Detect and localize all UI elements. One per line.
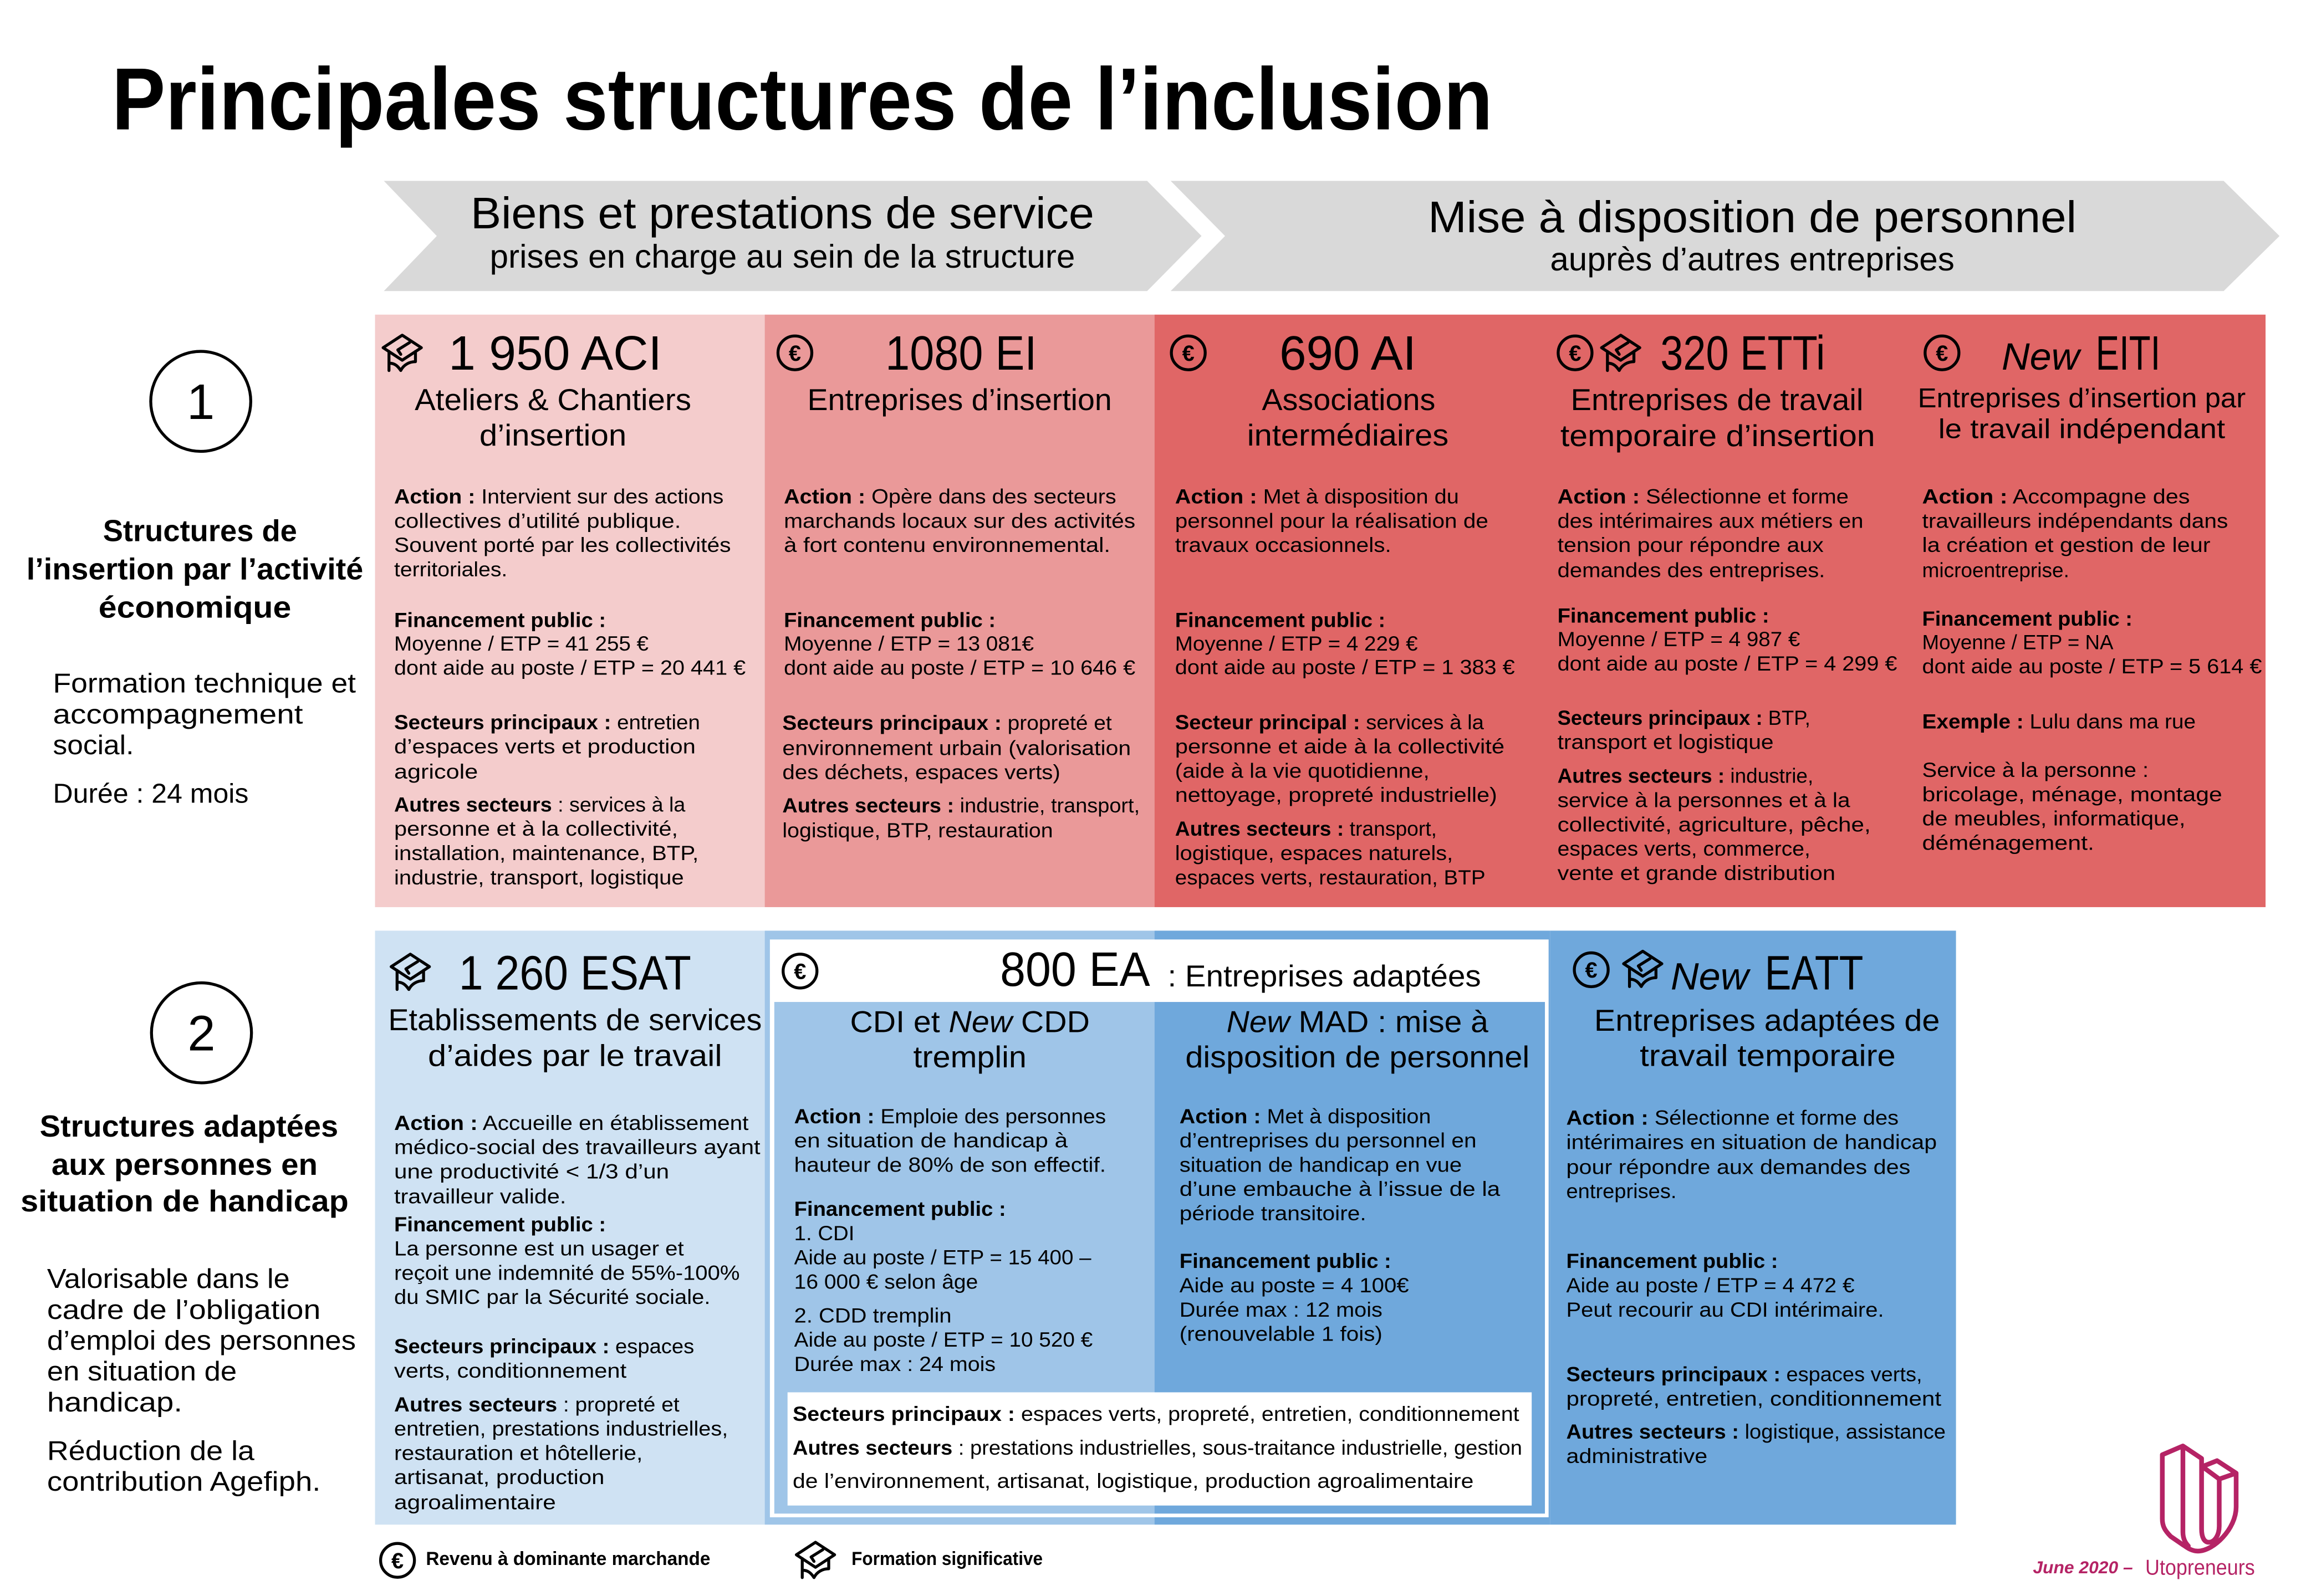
card: AI: Associations <box>1262 383 1435 417</box>
text block: ESAT: Action : Accueille en établissement <box>394 1111 749 1134</box>
card: AI: Action : Met à disposition du <box>1175 485 1459 508</box>
text block: ACI <box>394 485 746 889</box>
heading: ESAT: 1 260 ESAT <box>459 946 691 1000</box>
text block: ACI: dont aide au poste / ETP = 20 441 € <box>394 656 746 679</box>
text block: ESAT: artisanat, production <box>394 1465 604 1488</box>
sub-panel: CDI et New CDD tremplin: CDI et New CDD <box>850 1005 1090 1039</box>
card: ETTi: des intérimaires aux métiers en <box>1558 509 1863 532</box>
panel: ACI <box>375 315 765 907</box>
sub-panel: CDI et New CDD tremplin: en situation de handicap à <box>794 1129 1068 1152</box>
arrow: biens et prestations de service: prises en charge au sein de la structure <box>489 238 1075 275</box>
icon: formation <box>383 335 421 371</box>
sub-panel: New MAD: Action : Met à disposition <box>1180 1104 1431 1128</box>
card: EITI: Financement public : <box>1922 607 2132 630</box>
text block: EI: environnement urbain (valorisation <box>782 736 1131 759</box>
panel: EATT <box>1550 930 1956 1525</box>
text block: ACI: Moyenne / ETP = 41 255 € <box>394 632 649 655</box>
callout: secteurs EA: de l’environnement, artisanat, logistique, production agroalimentaire <box>793 1469 1473 1492</box>
card: ETTi: 320 ETTi <box>1660 326 1825 380</box>
text block: EATT: Action : Sélectionne et forme des <box>1567 1106 1899 1129</box>
icons: revenu marchand et formation: € <box>1585 958 1598 983</box>
card: EITI: déménagement. <box>1922 831 2094 854</box>
EA header <box>783 942 1481 996</box>
text block: ESAT <box>394 1111 761 1513</box>
legend: formation significative <box>797 1542 1043 1578</box>
section 2 label: structures adaptées handicap: en situation de <box>47 1357 237 1387</box>
sub-panel: CDI et New CDD tremplin: Action : Emploie des personnes <box>794 1104 1106 1128</box>
sub-panel: New MAD: période transitoire. <box>1180 1201 1366 1225</box>
text block: EATT: propreté, entretien, conditionnement <box>1567 1387 1942 1410</box>
text block: EATT: Financement public : <box>1567 1249 1778 1272</box>
legend: revenu à dominante marchande: Revenu à dominante marchande <box>426 1548 710 1569</box>
card: EITI: Action : Accompagne des <box>1922 485 2190 508</box>
text block: EI: Autres secteurs : industrie, transport, <box>782 794 1140 817</box>
section 1 label: insertion par l'activité économique: l’insertion par l’activité <box>27 552 363 586</box>
sub-panel: New MAD: New MAD : mise à <box>1227 1005 1489 1039</box>
section 1 label: insertion par l'activité économique: social. <box>53 730 134 760</box>
subtitle: EATT: Entreprises adaptées de <box>1594 1004 1940 1037</box>
legend: formation significative: Formation significative <box>851 1548 1043 1569</box>
card: AI: Autres secteurs : transport, <box>1175 817 1437 840</box>
logo: Utopreneurs <box>2033 1446 2255 1579</box>
card: ETTi: Entreprises de travail <box>1570 383 1863 417</box>
section 1 label: insertion par l'activité économique: Durée : 24 mois <box>53 779 248 809</box>
heading: EATT <box>1671 946 1863 1000</box>
card: EITI: le travail indépendant <box>1938 415 2225 444</box>
card: ETTi: temporaire d’insertion <box>1560 419 1875 453</box>
sub-panel: CDI et New CDD tremplin <box>774 1002 1155 1513</box>
text block: ESAT: du SMIC par la Sécurité sociale. <box>394 1285 710 1308</box>
card: EITI: microentreprise. <box>1922 558 2069 581</box>
text block: EI: Secteurs principaux : propreté et <box>782 711 1112 734</box>
heading: EATT: New <box>1671 955 1751 998</box>
icons: revenu marchand et formation <box>1574 952 1662 986</box>
text block: EATT <box>1567 1106 1946 1467</box>
panel: mise à disposition (AI, ETTi, EITI) <box>1155 315 2266 907</box>
brand name: Utopreneurs <box>2145 1556 2255 1579</box>
text block: EI: dont aide au poste / ETP = 10 646 € <box>784 656 1136 679</box>
card: ETTi: espaces verts, commerce, <box>1558 837 1810 860</box>
section 2 label: structures adaptées handicap: d’emploi des personnes <box>47 1326 356 1356</box>
text block: ACI: installation, maintenance, BTP, <box>394 841 698 864</box>
callout: secteurs EA: Secteurs principaux : espaces verts, propreté, entretien, conditionnement <box>793 1402 1519 1425</box>
card: ETTi: tension pour répondre aux <box>1558 533 1824 556</box>
icon: revenu marchand <box>778 336 812 370</box>
card: EITI: EITI <box>2096 326 2160 380</box>
section 2 label: structures adaptées handicap: aux personnes en <box>52 1148 318 1181</box>
text block: ACI: agricole <box>394 760 478 783</box>
card: EITI: Moyenne / ETP = NA <box>1922 630 2114 653</box>
card: EITI: dont aide au poste / ETP = 5 614 € <box>1922 654 2262 678</box>
card: ETTi: demandes des entreprises. <box>1558 558 1825 581</box>
card: AI: logistique, espaces naturels, <box>1175 841 1453 864</box>
heading: EI: 1080 EI <box>885 326 1037 380</box>
arrow: mise à disposition de personnel <box>1171 181 2279 291</box>
card: EITI: de meubles, informatique, <box>1922 807 2185 830</box>
text block: ACI: Action : Intervient sur des actions <box>394 485 723 508</box>
text block: ESAT: reçoit une indemnité de 55%-100% <box>394 1261 739 1284</box>
card: EITI: Entreprises d’insertion par <box>1918 383 2246 413</box>
card: AI: Moyenne / ETP = 4 229 € <box>1175 632 1418 655</box>
sub-panel: New MAD: Durée max : 12 mois <box>1180 1298 1382 1321</box>
heading: ACI: 1 950 ACI <box>448 326 662 380</box>
card: EITI: travailleurs indépendants dans <box>1922 509 2228 532</box>
text block: ACI: industrie, transport, logistique <box>394 866 684 889</box>
card: ETTi: Moyenne / ETP = 4 987 € <box>1558 627 1800 651</box>
sub-panel: CDI et New CDD tremplin: Aide au poste / ETP = 15 400 – <box>794 1246 1091 1269</box>
text block: EATT: entreprises. <box>1567 1179 1676 1203</box>
section 1 label: insertion par l'activité économique: économique <box>99 590 291 624</box>
EA header: : Entreprises adaptées <box>1168 959 1481 993</box>
panel: EA entreprises adaptées <box>765 930 1550 1525</box>
text block: EI: logistique, BTP, restauration <box>782 819 1053 842</box>
section 1 label: insertion par l'activité économique <box>27 351 363 809</box>
card: EITI: bricolage, ménage, montage <box>1922 782 2222 806</box>
text block: ESAT: restauration et hôtellerie, <box>394 1441 642 1464</box>
card: AI: dont aide au poste / ETP = 1 383 € <box>1175 655 1515 678</box>
text block: EATT: administrative <box>1567 1444 1707 1467</box>
date: June 2020 – <box>2033 1557 2133 1577</box>
card: AI <box>1171 326 1515 889</box>
text block: EI <box>782 485 1140 842</box>
text block: EATT: Secteurs principaux : espaces verts, <box>1567 1363 1922 1386</box>
text block: EATT: pour répondre aux demandes des <box>1567 1155 1910 1178</box>
card: EITI: Exemple : Lulu dans ma rue <box>1922 710 2196 733</box>
card: AI: Secteur principal : services à la <box>1175 710 1484 734</box>
subtitle: EI: Entreprises d’insertion <box>808 383 1112 417</box>
text block: ESAT: médico-social des travailleurs ayant <box>394 1135 761 1159</box>
card: ETTi: Autres secteurs : industrie, <box>1558 764 1813 787</box>
title: Principales structures de l’inclusion <box>112 49 1493 148</box>
subtitle: ACI <box>415 383 691 452</box>
sub-panel: New MAD: d’une embauche à l’issue de la <box>1180 1177 1501 1200</box>
sub-panel: CDI et New CDD tremplin: Financement public : <box>794 1197 1006 1220</box>
text block: ACI: d’espaces verts et production <box>394 735 696 758</box>
subtitle: ESAT: Etablissements de services <box>388 1003 762 1037</box>
section 2 label: structures adaptées handicap: cadre de l’obligation <box>47 1295 320 1325</box>
text block: ESAT: travailleur valide. <box>394 1185 566 1208</box>
text block: EI: à fort contenu environnemental. <box>784 533 1110 556</box>
text block: EI: marchands locaux sur des activités <box>784 509 1135 532</box>
subtitle: ESAT: d’aides par le travail <box>428 1039 722 1072</box>
card: ETTi: Secteurs principaux : BTP, <box>1558 706 1810 729</box>
card: EITI: New <box>2002 335 2082 378</box>
sub-panel: CDI et New CDD tremplin: 2. CDD tremplin <box>794 1303 952 1327</box>
callout: secteurs EA: Autres secteurs : prestations industrielles, sous-traitance industrielle, gestion <box>793 1436 1522 1459</box>
text block: ACI: Souvent porté par les collectivités <box>394 533 731 556</box>
sub-panel: New MAD: Aide au poste = 4 100€ <box>1180 1273 1409 1297</box>
card: ETTi: Financement public : <box>1558 604 1769 627</box>
subtitle: ACI: Ateliers & Chantiers <box>415 383 691 417</box>
sub-panel: CDI et New CDD tremplin: 16 000 € selon âge <box>794 1270 978 1293</box>
card: ETTi: € <box>1569 341 1581 366</box>
text block: ACI: collectives d’utilité publique. <box>394 509 681 532</box>
section 2 label: structures adaptées handicap: situation de handicap <box>21 1184 349 1218</box>
text block: EATT: intérimaires en situation de handicap <box>1567 1130 1937 1153</box>
section 2 label: structures adaptées handicap: Valorisable dans le <box>47 1264 290 1294</box>
text block: ESAT: Secteurs principaux : espaces <box>394 1334 694 1358</box>
card: AI: nettoyage, propreté industrielle) <box>1175 783 1497 806</box>
section 1 label: insertion par l'activité économique: 1 <box>187 374 215 430</box>
card: EITI <box>1918 326 2262 854</box>
text block: ACI: Autres secteurs : services à la <box>394 792 686 816</box>
text block: ESAT: agroalimentaire <box>394 1490 556 1513</box>
card: EITI: la création et gestion de leur <box>1922 533 2211 556</box>
arrow: mise à disposition de personnel: Mise à disposition de personnel <box>1428 192 2077 242</box>
card: AI: travaux occasionnels. <box>1175 533 1391 556</box>
card: AI: Financement public : <box>1175 608 1385 632</box>
sub-panel: CDI et New CDD tremplin: hauteur de 80% de son effectif. <box>794 1153 1106 1176</box>
text block: EATT: Peut recourir au CDI intérimaire. <box>1567 1298 1884 1321</box>
icon: formation <box>391 954 430 990</box>
section 1 label: insertion par l'activité économique: Formation technique et <box>53 669 356 699</box>
text block: EI: Moyenne / ETP = 13 081€ <box>784 632 1034 655</box>
text block: ESAT: Financement public : <box>394 1213 606 1236</box>
text block: ACI: Secteurs principaux : entretien <box>394 710 700 734</box>
text block: ESAT: Autres secteurs : propreté et <box>394 1393 680 1416</box>
heading: EATT: EATT <box>1765 946 1863 1000</box>
text block: ESAT: une productivité < 1/3 d’un <box>394 1159 669 1183</box>
section 2 label: structures adaptées handicap: Réduction de la <box>47 1436 255 1466</box>
sub-panel: New MAD: (renouvelable 1 fois) <box>1180 1322 1382 1346</box>
text block: EI: Financement public : <box>784 608 996 632</box>
text block: ESAT: verts, conditionnement <box>394 1359 627 1382</box>
text block: ACI: Financement public : <box>394 608 606 632</box>
text block: EI: des déchets, espaces verts) <box>782 760 1060 784</box>
text block: ESAT: entretien, prestations industrielles, <box>394 1417 728 1440</box>
card: ETTi: transport et logistique <box>1558 730 1774 754</box>
sub-panel: CDI et New CDD tremplin: Durée max : 24 mois <box>794 1352 996 1375</box>
sub-panel: New MAD: Financement public : <box>1180 1249 1391 1272</box>
card: AI: intermédiaires <box>1247 418 1448 452</box>
card: AI: personnel pour la réalisation de <box>1175 509 1488 532</box>
legend: revenu à dominante marchande <box>381 1543 710 1577</box>
section 2 label: structures adaptées handicap <box>21 983 356 1497</box>
section 1 label: insertion par l'activité économique: accompagnement <box>53 699 303 729</box>
text block: ESAT: La personne est un usager et <box>394 1237 684 1260</box>
text block: EATT: Aide au poste / ETP = 4 472 € <box>1567 1273 1855 1297</box>
subtitle: ACI: d’insertion <box>479 418 626 452</box>
card: ETTi <box>1558 326 1897 884</box>
subtitle: ESAT <box>388 1003 762 1072</box>
card: ETTi: vente et grande distribution <box>1558 861 1835 884</box>
sub-panel: CDI et New CDD tremplin: tremplin <box>914 1040 1027 1074</box>
sub-panel: CDI et New CDD tremplin: Aide au poste / ETP = 10 520 € <box>794 1328 1093 1351</box>
card: AI: personne et aide à la collectivité <box>1175 735 1504 758</box>
sub-panel: New MAD <box>1155 1002 1545 1513</box>
sub-panel: New MAD: d’entreprises du personnel en <box>1180 1129 1477 1152</box>
arrow: biens et prestations de service <box>384 181 1202 291</box>
panel: EI <box>765 315 1155 907</box>
callout: secteurs EA <box>788 1392 1532 1506</box>
EA header: € <box>794 959 806 984</box>
card: AI: (aide à la vie quotidienne, <box>1175 759 1430 782</box>
icon: revenu marchand: € <box>789 341 801 366</box>
sub-panel: New MAD: disposition de personnel <box>1185 1040 1529 1074</box>
panel: ESAT <box>375 930 765 1525</box>
EA header: 800 EA <box>1000 942 1150 996</box>
card: ETTi: Action : Sélectionne et forme <box>1558 485 1849 508</box>
card: AI: espaces verts, restauration, BTP <box>1175 866 1486 889</box>
section 2 label: structures adaptées handicap: contribution Agefiph. <box>47 1467 320 1497</box>
card: AI: € <box>1182 341 1195 366</box>
text block: EI: Action : Opère dans des secteurs <box>784 485 1116 508</box>
arrow: biens et prestations de service: Biens et prestations de service <box>471 188 1094 238</box>
section 2 label: structures adaptées handicap: 2 <box>187 1006 216 1062</box>
arrow: mise à disposition de personnel: auprès d’autres entreprises <box>1550 241 1955 278</box>
card: ETTi: service à la personnes et à la <box>1558 789 1850 812</box>
card: EITI: € <box>1936 341 1948 366</box>
card: ETTi: dont aide au poste / ETP = 4 299 € <box>1558 652 1897 675</box>
sub-panel: CDI et New CDD tremplin: 1. CDI <box>794 1221 854 1245</box>
subtitle: EATT <box>1594 1004 1940 1072</box>
section 1 label: insertion par l'activité économique: Structures de <box>103 514 297 548</box>
text block: ACI: personne et à la collectivité, <box>394 817 678 840</box>
card: ETTi: collectivité, agriculture, pêche, <box>1558 812 1871 836</box>
sub-panel: New MAD: situation de handicap en vue <box>1180 1153 1462 1176</box>
subtitle: EATT: travail temporaire <box>1640 1039 1896 1072</box>
section 2 label: structures adaptées handicap: Structures adaptées <box>40 1109 338 1143</box>
text block: EATT: Autres secteurs : logistique, assistance <box>1567 1420 1946 1443</box>
card: EITI: Service à la personne : <box>1922 758 2149 781</box>
text block: ACI: territoriales. <box>394 557 507 581</box>
card: AI: 690 AI <box>1279 326 1416 380</box>
legend: revenu à dominante marchande: € <box>391 1549 404 1573</box>
section 2 label: structures adaptées handicap: handicap. <box>47 1388 182 1418</box>
